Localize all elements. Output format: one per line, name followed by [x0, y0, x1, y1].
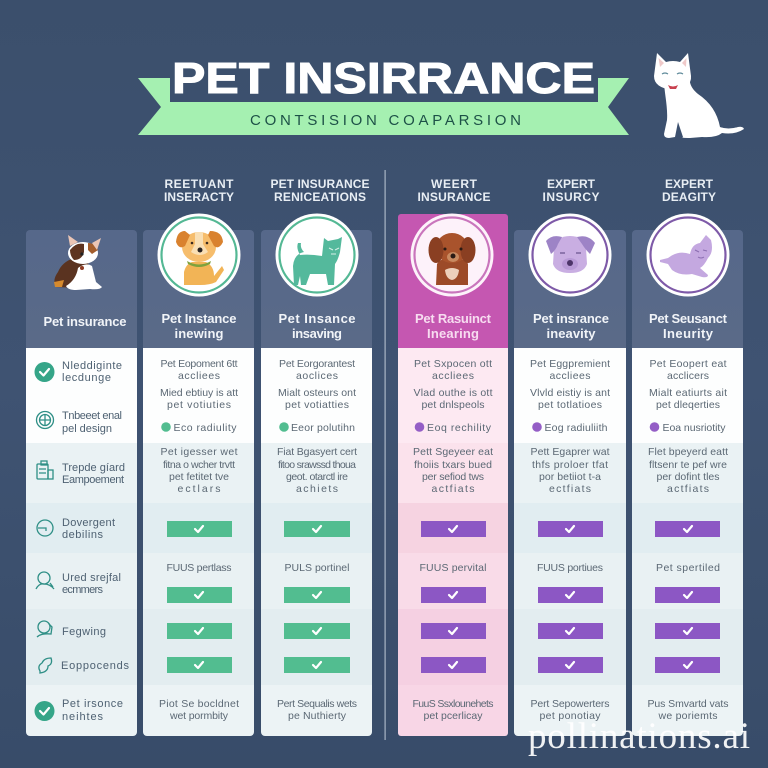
icon: person: [36, 572, 54, 589]
cell text: Piot Se bocldnet: [159, 698, 239, 710]
panel: feature labels: [26, 230, 137, 736]
watermark: pollinations.ai: [528, 716, 750, 757]
heading: Pet Insance: [278, 311, 356, 326]
main title: PET INSIRRANCE: [172, 54, 595, 103]
cell text: Eoa nusriotity: [662, 422, 726, 434]
cell text: pet ponotiay: [540, 710, 601, 722]
icon: clipboard: [37, 461, 53, 479]
cell text: accliees: [178, 370, 220, 382]
feature rows: ecmmers: [62, 584, 104, 596]
cell text: Eog radiuliith: [544, 422, 608, 434]
icon: teal cat badge: [276, 214, 358, 296]
cell text: achiets: [296, 483, 338, 495]
icon: leaf outline: [39, 658, 52, 673]
panel: plan 4: [514, 214, 626, 736]
heading: Pet Rasuinct: [415, 311, 492, 326]
cell text: Pert Sequalis wets: [277, 698, 357, 710]
cell text: Fiat Bgasyert cert: [277, 446, 357, 458]
cell text: pet totlatioes: [538, 399, 602, 411]
cell text: Vlad outhe is ott: [414, 387, 493, 399]
feature rows: [34, 360, 130, 723]
check bars: [421, 521, 486, 673]
title banner: [138, 54, 629, 135]
cell text: aoclices: [296, 370, 338, 382]
panel: plan 3 highlighted: [398, 214, 508, 736]
cell text: ectfiats: [549, 483, 591, 495]
feature rows: Tnbeeet enal: [62, 410, 122, 422]
feature rows: lecdunge: [62, 372, 111, 384]
check bars: [538, 521, 603, 673]
column headings: PET INSURANCE: [270, 177, 370, 191]
column headings: EXPERT: [547, 177, 596, 191]
cell text: wet pormbity: [169, 710, 229, 722]
column headings: [164, 177, 716, 204]
heading: pet insurance: Pet insurance: [44, 314, 126, 329]
check bars: [284, 521, 350, 673]
cell text: Flet bpeyerd eatt: [648, 446, 728, 458]
cell text: pet dnlspeols: [422, 399, 484, 411]
heading: Ineurity: [663, 326, 714, 341]
cell text: Pet Eoopert eat: [650, 358, 727, 370]
icon: corgi: [54, 235, 102, 290]
icon: purple dog badge: [528, 214, 612, 296]
heading: [649, 311, 728, 341]
heading: insaving: [292, 326, 342, 341]
cell text: per dofint tles: [656, 471, 720, 483]
icon: clock: [37, 520, 53, 536]
cell text: FuuS Ssxlounehets: [412, 698, 494, 710]
cell text: [648, 358, 728, 722]
cell text: Pet Eopoment 6tt: [160, 358, 238, 370]
cell text: accliees: [432, 370, 474, 382]
icon: green check: [34, 701, 54, 721]
subtitle: CONTSISION COAPARSION: [250, 112, 521, 129]
cell text: Pet spertiled: [656, 562, 720, 574]
cell text: accliees: [550, 370, 590, 382]
cell text: Pet Sxpocen ott: [414, 358, 492, 370]
feature rows: Dovergent: [62, 517, 115, 529]
cell text: ectlars: [178, 483, 220, 495]
cell text: [412, 358, 494, 722]
cell text: fltsenr te pef wre: [649, 459, 727, 471]
cell text: pet dleqerties: [656, 399, 720, 411]
cell text: por betiiot t-a: [539, 471, 601, 483]
column headings: DEAGITY: [662, 190, 716, 204]
icon: purple piglet badge: [646, 214, 730, 296]
icon: white cat: [654, 53, 744, 138]
cell text: acclicers: [667, 370, 709, 382]
feature rows: neihtes: [62, 711, 104, 723]
column headings: WEERT: [431, 177, 478, 191]
cell text: FUUS pervital: [420, 562, 486, 574]
cell text: Pett Sgeyeer eat: [413, 446, 493, 458]
feature rows: Eampoement: [62, 474, 124, 486]
cell text: actfiats: [432, 483, 474, 495]
cell text: fitoo srawssd thoua: [278, 459, 356, 471]
feature rows: Nleddiginte: [62, 360, 122, 372]
cell text: fhoiis txars bued: [414, 459, 492, 471]
check bars: [167, 521, 232, 673]
cell text: Mialt osteurs ont: [278, 387, 356, 399]
cell text: Pett Egaprer wat: [530, 446, 610, 458]
cell text: Pus Smvartd vats: [648, 698, 728, 710]
column headings: INSURANCE: [418, 190, 490, 204]
cell text: Pet Eggpremient: [530, 358, 610, 370]
heading: ineavity: [546, 326, 596, 341]
cell text: FUUS pertlass: [166, 562, 232, 574]
panel: plan 1: [143, 214, 254, 736]
column headings: REETUANT: [164, 177, 234, 191]
icon: paw outline: [37, 621, 52, 637]
cell text: [530, 358, 610, 722]
heading: Inearing: [427, 326, 479, 341]
cell text: pet pcerlicay: [424, 710, 483, 722]
feature rows: Trepde gíard: [62, 462, 125, 474]
cell text: actfiats: [667, 483, 709, 495]
column headings: INSERACTY: [164, 190, 234, 204]
column headings: RENICEATIONS: [274, 190, 366, 204]
cell text: PULS portinel: [284, 562, 350, 574]
panel: plan 5: [632, 214, 743, 736]
cell text: Vlvld eistiy is ant: [530, 387, 610, 399]
cell text: [159, 358, 239, 722]
panel: plan 2: [261, 214, 372, 736]
cell text: thfs proloer tfat: [532, 459, 608, 471]
cell text: Pet Eorgorantest: [279, 358, 355, 370]
heading: Pet insrance: [533, 311, 609, 326]
cell text: FUUS portiues: [537, 562, 603, 574]
cell text: Eco radiulity: [174, 422, 237, 434]
heading: [533, 311, 609, 341]
cell text: Pert Sepowerters: [530, 698, 610, 710]
cell text: Mied ebtiuy is att: [160, 387, 238, 399]
cell text: pe Nuthierty: [288, 710, 347, 722]
heading: [415, 311, 492, 341]
icon: globe: [36, 412, 54, 428]
cell text: we poriemts: [658, 710, 718, 722]
cell text: Eeor polutihn: [291, 422, 355, 434]
feature rows: Pet irsonce: [62, 698, 123, 710]
cell text: Pet igesser wet: [160, 446, 238, 458]
cell text: pet votiuties: [167, 399, 231, 411]
feature rows: Ured srejfal: [62, 572, 121, 584]
cell text: [277, 358, 357, 722]
cell text: Mialt eatiurts ait: [649, 387, 727, 399]
ribbon: [138, 78, 629, 135]
icon: green check: [34, 362, 54, 382]
cell text: pet fetitet tve: [169, 471, 229, 483]
cell text: Eoq rechility: [427, 422, 492, 434]
cell text: geot. otarctl ire: [286, 471, 348, 483]
column headings: EXPERT: [665, 177, 714, 191]
icon: brown puppy badge: [410, 214, 494, 296]
column headings: INSURCY: [542, 190, 600, 204]
cell text: fitna o wcher trvtt: [163, 459, 235, 471]
icon: orange puppy badge: [158, 214, 240, 296]
feature rows: Eoppocends: [61, 660, 130, 672]
cell text: per sefiod tws: [422, 471, 484, 483]
heading: Pet Instance: [162, 311, 236, 326]
feature rows: debilins: [62, 529, 104, 541]
vertical divider: [384, 170, 386, 740]
check bars: [655, 521, 720, 673]
heading: Pet Seusanct: [649, 311, 728, 326]
heading: inewing: [174, 326, 224, 341]
cell text: pet votiatties: [285, 399, 349, 411]
feature rows: Fegwing: [62, 626, 106, 638]
feature rows: pel design: [62, 423, 112, 435]
heading: [278, 311, 356, 341]
heading: [162, 311, 236, 341]
